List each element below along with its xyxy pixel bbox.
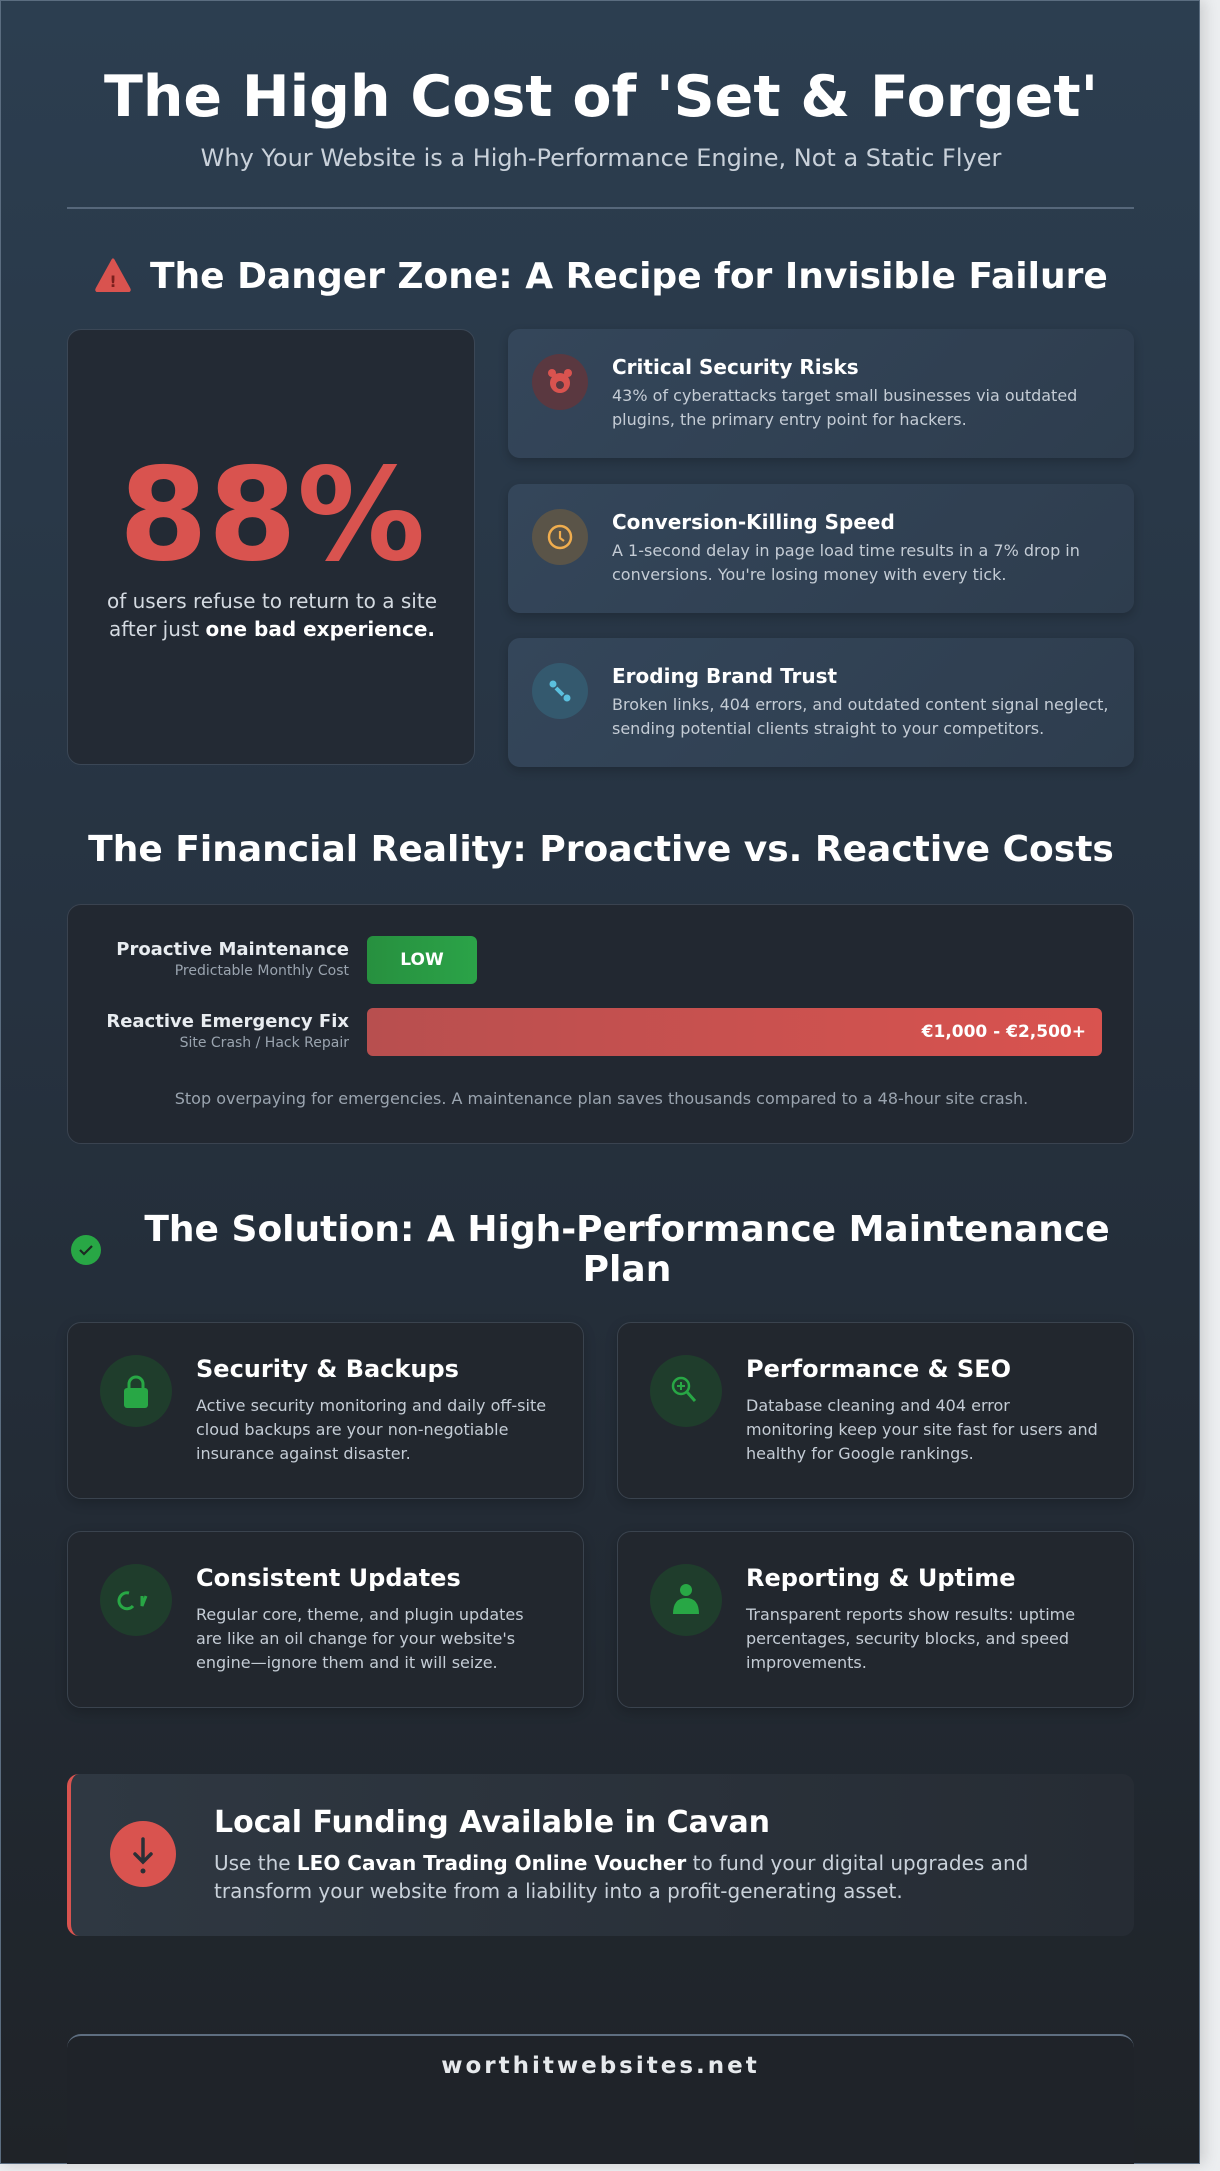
icon: refresh <box>100 1564 172 1636</box>
stat caption: after just one bad experience. <box>109 617 435 641</box>
heading: solution: The Solution: A High-Performance Maintenance <box>144 1209 1110 1250</box>
icon: warning: ! <box>109 272 117 291</box>
card: consistent updates: Consistent Updates <box>196 1564 461 1592</box>
icon: check <box>71 1235 101 1265</box>
card: security & backups <box>67 1322 584 1499</box>
callout body: Use the LEO Cavan Trading Online Voucher to fund your digital upgrades and transform your website from a liability into a profit-generating asset. <box>214 1851 1028 1903</box>
card: reporting & uptime <box>617 1531 1134 1708</box>
callout: local funding <box>67 1774 1134 1936</box>
icon: user <box>650 1564 722 1636</box>
icon: clock <box>532 509 588 565</box>
bar: high cost: €1,000 - €2,500+ <box>922 1022 1086 1042</box>
card: performance & seo <box>617 1322 1134 1499</box>
bar: low: LOW <box>400 950 444 970</box>
icon: broken link <box>532 663 588 719</box>
label: reactive: Site Crash / Hack Repair <box>180 1035 349 1051</box>
icon: lock <box>100 1355 172 1427</box>
label: proactive: Predictable Monthly Cost <box>175 963 349 979</box>
note: Stop overpaying for emergencies. A maintenance plan saves thousands compared to a 48-hour site crash. <box>175 1089 1028 1108</box>
footer <box>67 2034 1134 2164</box>
card: speed <box>508 484 1134 613</box>
card: security risks: 43% of cyberattacks target small businesses via outdated plugins, the primary entry point for hackers. <box>612 386 1077 429</box>
card: security risks: Critical Security Risks <box>612 355 859 379</box>
icon: warning <box>95 258 131 292</box>
card: consistent updates: Regular core, theme, and plugin updates are like an oil change for your website's engine—ignore them and it will seize. <box>196 1605 524 1672</box>
card: consistent updates <box>67 1531 584 1708</box>
footer url: worthitwebsites.net <box>441 2053 760 2079</box>
label: proactive <box>116 939 349 979</box>
icon: magnifier <box>650 1355 722 1427</box>
panel: cost comparison <box>67 904 1134 1144</box>
label: reactive: Reactive Emergency Fix <box>106 1011 349 1032</box>
title: The High Cost of 'Set & Forget' <box>104 64 1098 130</box>
stat caption: of users refuse to return to a site <box>107 589 437 613</box>
icon: download arrow <box>110 1821 176 1887</box>
callout title: Local Funding Available in Cavan <box>214 1805 770 1840</box>
card: speed: Conversion-Killing Speed <box>612 510 895 534</box>
text: The Danger Zone: A Recipe for Invisible Failure <box>150 256 1108 297</box>
card: brand trust: Broken links, 404 errors, and outdated content signal neglect, sending potential clients straight to your competitors. <box>612 695 1108 738</box>
label: reactive <box>106 1011 349 1051</box>
card: reporting & uptime: Reporting & Uptime <box>746 1564 1016 1592</box>
heading: financial reality: The Financial Reality: Proactive vs. Reactive Costs <box>88 829 1114 870</box>
card: brand trust <box>508 638 1134 767</box>
card: security & backups: Security & Backups <box>196 1355 459 1383</box>
heading: danger zone <box>95 256 1108 297</box>
bar: high cost <box>367 1008 1102 1056</box>
card: speed: A 1-second delay in page load time results in a 7% drop in conversions. You're losing money with every tick. <box>612 541 1080 584</box>
card: performance & seo: Database cleaning and 404 error monitoring keep your site fast for users and healthy for Google rankings. <box>746 1396 1098 1463</box>
heading: solution: Plan <box>583 1249 671 1290</box>
card: brand trust: Eroding Brand Trust <box>612 664 837 688</box>
card: reporting & uptime: Transparent reports show results: uptime percentages, security blocks, and speed improvements. <box>746 1605 1075 1672</box>
card: security risks <box>508 329 1134 458</box>
panel: 88% stat <box>67 329 475 765</box>
big stat: 88% <box>119 441 425 590</box>
label: proactive: Proactive Maintenance <box>116 939 349 960</box>
heading: solution <box>71 1209 1110 1290</box>
stat caption <box>107 589 437 641</box>
card: performance & seo: Performance & SEO <box>746 1355 1011 1383</box>
subtitle: Why Your Website is a High-Performance Engine, Not a Static Flyer <box>201 144 1001 172</box>
bar: low <box>367 936 477 984</box>
icon: bug <box>532 354 588 410</box>
card: security & backups: Active security monitoring and daily off-site cloud backups are your non-negotiable insurance against disaster. <box>196 1396 546 1463</box>
